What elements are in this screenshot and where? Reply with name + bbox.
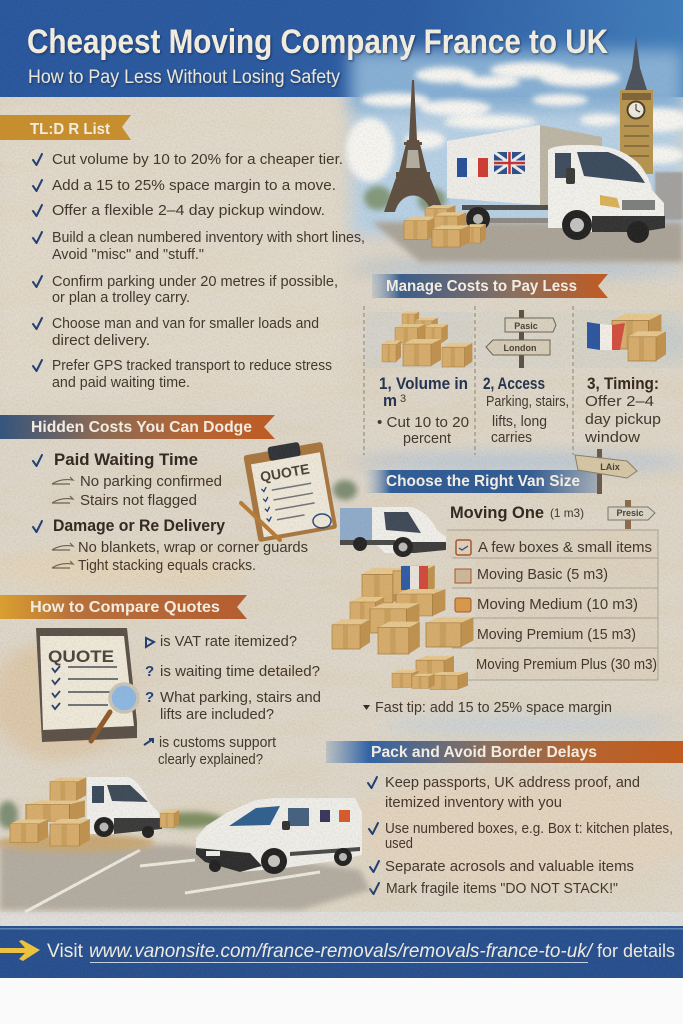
- column text: access: lifts, long: [492, 414, 547, 430]
- illustration: small truck: [340, 507, 446, 557]
- column text: volume: [377, 375, 469, 447]
- icon: signpost LAix: LAix: [600, 462, 620, 472]
- panel: hidden costs: Paid Waiting Time: [54, 451, 198, 469]
- panel: TL;DR list: direct delivery.: [52, 333, 150, 349]
- panel: TL;DR list: [33, 152, 365, 391]
- panel: TL;DR list: Cut volume by 10 to 20% for a cheaper tier.: [52, 152, 343, 168]
- panel: TL;DR list: Choose man and van for smaller loads and: [52, 316, 319, 332]
- heading: moving one: (1 m3): [550, 506, 584, 520]
- panel: hidden costs: Damage or Re Delivery: [53, 517, 226, 535]
- panel: TL;DR list: Build a clean numbered inventory with short lines,: [52, 230, 365, 246]
- panel: compare questions: [144, 634, 321, 768]
- icon: signpost Presic: [608, 500, 655, 529]
- row: moving medium: Moving Medium (10 m3): [477, 597, 638, 613]
- column text: volume: 1, Volume in: [379, 375, 468, 393]
- panel: manage costs columns: [364, 306, 683, 455]
- illustration: road: [372, 222, 683, 262]
- column text: timing: [584, 375, 661, 446]
- icon: quote sheet with magnifier: [36, 628, 138, 742]
- panel: compare questions: is VAT rate itemized?: [160, 634, 297, 650]
- panel: TL;DR list: Confirm parking under 20 metres if possible,: [52, 274, 338, 290]
- column image: signpost: Pasic: [514, 321, 538, 331]
- panel: compare questions: ?: [145, 689, 154, 706]
- column text: timing: Offer 2–4: [585, 394, 654, 410]
- footer band: [0, 926, 683, 978]
- panel: hidden costs: Tight stacking equals cracks.: [78, 558, 256, 574]
- ribbon: choose van size: [362, 470, 600, 493]
- column text: access: [483, 375, 569, 446]
- panel: pack list: Keep passports, UK address proof, and: [385, 775, 640, 791]
- column text: volume: 3: [400, 393, 406, 405]
- panel: compare questions: lifts are included?: [160, 707, 274, 723]
- footer text: www.vanonsite.com/france-removals/removals-france-to-uk/: [89, 941, 594, 962]
- panel: TL;DR list: Prefer GPS tracked transport to reduce stress: [52, 358, 332, 374]
- panel: compare questions: What parking, stairs and: [160, 690, 321, 706]
- panel: compare questions: ?: [145, 663, 154, 680]
- ribbon: manage costs: [372, 274, 608, 298]
- title: Cheapest Moving Company France to UK: [27, 23, 608, 61]
- subtitle: How to Pay Less Without Losing Safety: [28, 67, 340, 88]
- column text: volume: m: [383, 392, 397, 410]
- ribbon: pack and avoid border delays: Pack and Avoid Border Delays: [371, 744, 597, 761]
- panel: compare questions: clearly explained?: [158, 752, 263, 768]
- column text: volume: • Cut 10 to 20: [377, 415, 469, 431]
- fast tip: Fast tip: add 15 to 25% space margin: [375, 700, 612, 716]
- panel: TL;DR list: Avoid "misc" and "stuff.": [52, 247, 204, 263]
- panel: hidden costs: [33, 451, 308, 574]
- illustration: white van on road: [196, 798, 362, 874]
- illustration: boxes by truck: [404, 205, 486, 247]
- panel: TL;DR list: or plan a trolley carry.: [52, 290, 190, 306]
- icon: signpost Presic: Presic: [616, 508, 644, 518]
- illustration: moving truck: [447, 125, 665, 243]
- panel: pack list: itemized inventory with you: [385, 795, 562, 811]
- column image: signpost: [478, 310, 571, 368]
- panel: TL;DR list: and paid waiting time.: [52, 375, 190, 391]
- panel: compare questions: is customs support: [159, 735, 276, 751]
- illustration: box pile with flag: [332, 565, 474, 654]
- illustration: bushes by small truck: [333, 480, 357, 500]
- footer text: Visit: [47, 941, 84, 962]
- van size table: [447, 530, 658, 680]
- column image: boxes: [366, 312, 473, 368]
- column text: access: 2, Access: [483, 375, 545, 393]
- panel: hidden costs: No blankets, wrap or corner guards: [78, 540, 308, 556]
- icon: quote clipboard with pencil: QUOTE: [259, 460, 311, 485]
- column text: access: Parking, stairs,: [486, 394, 569, 410]
- column image: signpost: London: [504, 343, 536, 353]
- illustration: road lower left: [0, 801, 370, 912]
- panel: hidden costs: No parking confirmed: [80, 474, 222, 490]
- panel: pack list: Mark fragile items "DO NOT STACK!": [386, 881, 618, 897]
- ribbon: choose van size: Choose the Right Van Size: [386, 473, 580, 490]
- ribbon: compare quotes: How to Compare Quotes: [30, 599, 220, 616]
- icon: Big Ben: [620, 36, 653, 174]
- ribbon: TL;DR list: TL:D R List: [30, 121, 111, 138]
- ribbon: compare quotes: [0, 595, 247, 619]
- ribbon: TL;DR list: [0, 115, 131, 140]
- icon: yellow arrow: [0, 940, 40, 961]
- column text: timing: day pickup: [585, 412, 661, 428]
- row: moving basic: Moving Basic (5 m3): [477, 567, 608, 583]
- panel: TL;DR list: Offer a flexible 2–4 day pickup window.: [52, 203, 325, 219]
- icon: Eiffel Tower: [384, 80, 444, 212]
- hero sky and clouds: [0, 0, 683, 235]
- icon: quote clipboard with pencil: [241, 438, 337, 542]
- icon: quote sheet with magnifier: QUOTE: [48, 647, 114, 666]
- panel: hidden costs: Stairs not flagged: [80, 493, 197, 509]
- panel: pack list: [368, 775, 673, 897]
- ribbon: hidden costs: [0, 415, 275, 439]
- panel: TL;DR list: Add a 15 to 25% space margin to a move.: [52, 178, 336, 194]
- column text: volume: percent: [403, 431, 451, 447]
- illustration: distant buildings: [655, 172, 683, 220]
- ribbon: manage costs: Manage Costs to Pay Less: [386, 278, 577, 295]
- icon: signpost LAix: [575, 449, 637, 494]
- illustration: white van with boxes: [10, 777, 179, 846]
- ribbon: hidden costs: Hidden Costs You Can Dodge: [31, 419, 252, 436]
- illustration: trees: [364, 186, 446, 212]
- panel: pack list: Separate acrosols and valuable items: [385, 859, 634, 875]
- column image: flag and boxes: [574, 310, 683, 368]
- panel: compare questions: is waiting time detailed?: [160, 664, 320, 680]
- footer text: for details: [597, 941, 675, 961]
- panel: pack list: used: [385, 836, 413, 852]
- ribbon: pack and avoid border delays: [326, 741, 683, 763]
- heading: moving one: Moving One: [450, 504, 544, 522]
- column text: timing: window: [584, 430, 641, 446]
- column text: timing: 3, Timing:: [587, 375, 659, 393]
- illustration: small box pile: [392, 656, 468, 690]
- row: moving premium: Moving Premium (15 m3): [477, 627, 636, 643]
- row: moving premium plus: Moving Premium Plus (30 m3): [476, 657, 657, 673]
- column text: access: carries: [491, 430, 532, 446]
- row: a few boxes: A few boxes & small items: [478, 540, 652, 556]
